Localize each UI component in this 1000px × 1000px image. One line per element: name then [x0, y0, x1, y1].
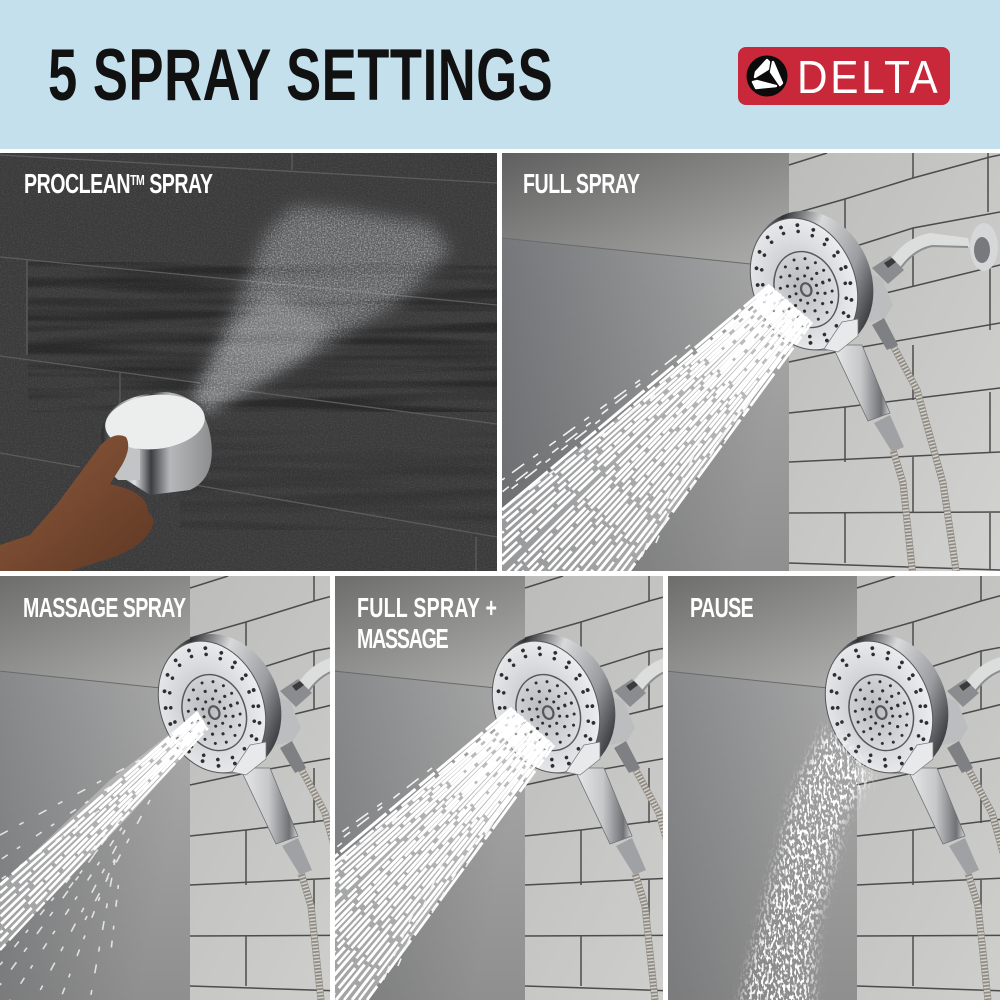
label: full spray + massage: FULL SPRAY +	[357, 593, 497, 624]
title: 5 SPRAY SETTINGS	[48, 35, 553, 116]
water: sparse droplets	[0, 760, 165, 1000]
panel: pause	[668, 576, 1000, 1000]
header band	[0, 0, 1000, 149]
spray mist	[186, 198, 455, 419]
label: ProClean: PROCLEAN	[24, 169, 131, 200]
label: pause: PAUSE	[690, 593, 754, 624]
label: full spray: FULL SPRAY	[523, 169, 640, 200]
water: full spray	[502, 285, 812, 577]
label: ProClean: TM	[130, 171, 145, 188]
panel: full spray + massage	[335, 576, 663, 1000]
logo: Delta: DELTA	[797, 52, 938, 103]
panel: ProClean spray	[0, 153, 497, 571]
label: full spray + massage	[357, 593, 497, 655]
icon: chrome hand shower	[101, 390, 212, 495]
label: full spray + massage: MASSAGE	[357, 624, 449, 655]
label: ProClean: SPRAY	[144, 169, 213, 200]
water: combined spray	[335, 707, 555, 1000]
water: massage jet	[0, 712, 208, 950]
panel: massage spray	[0, 576, 330, 1000]
panel: full spray	[502, 153, 1000, 577]
label: massage spray: MASSAGE SPRAY	[23, 593, 186, 624]
icon: hand pressing button	[0, 435, 154, 571]
water: pause trickle	[734, 720, 878, 1000]
logo: Delta	[738, 47, 950, 105]
